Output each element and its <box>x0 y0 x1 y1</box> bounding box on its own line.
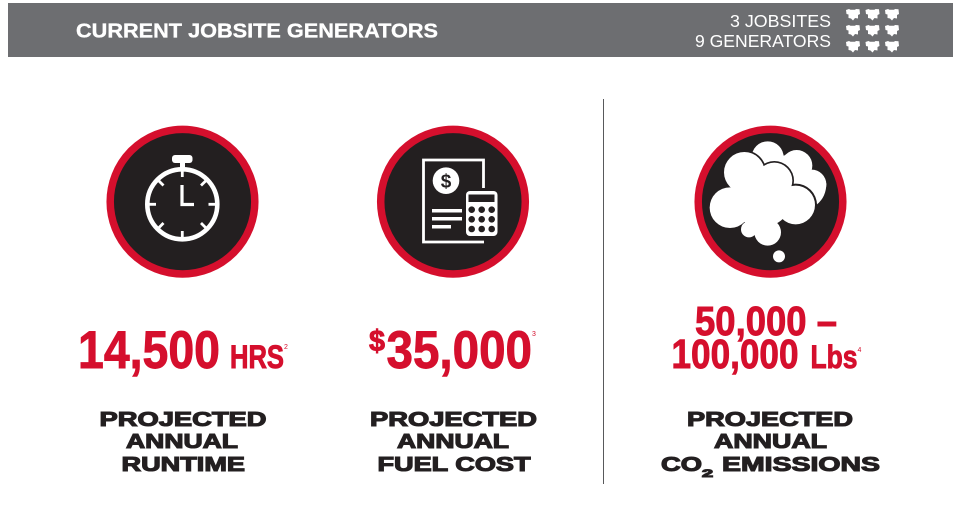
label: CO2 emissions: ANNUAL <box>714 431 827 453</box>
label: CO2 emissions: CO <box>661 454 702 476</box>
stat: fuel cost: $ <box>369 325 385 358</box>
label: fuel cost: ANNUAL <box>397 431 509 453</box>
label: CO2 emissions: 2 <box>702 468 713 480</box>
label: fuel cost <box>370 409 537 476</box>
stat: runtime: HRS <box>230 339 284 375</box>
label: runtime: RUNTIME <box>122 454 245 476</box>
header title: CURRENT JOBSITE GENERATORS <box>76 20 438 42</box>
divider <box>603 99 604 484</box>
label: CO2 emissions <box>661 409 880 480</box>
stat: runtime: 14,500 <box>78 321 220 380</box>
label: runtime: PROJECTED <box>100 409 266 431</box>
label: runtime <box>100 409 266 476</box>
stat: runtime: 2 <box>284 344 288 351</box>
jobsites count <box>695 11 831 51</box>
stat: CO2 emissions: 50,000 – <box>695 298 837 344</box>
stat: CO2 emissions: 4 <box>858 347 862 354</box>
stat: CO2 emissions <box>672 298 862 377</box>
label: runtime: ANNUAL <box>126 431 238 453</box>
label: fuel cost: PROJECTED <box>370 409 537 431</box>
label: CO2 emissions: EMISSIONS <box>722 454 880 476</box>
stat: CO2 emissions: Lbs <box>810 339 858 375</box>
stat: fuel cost: 3 <box>532 331 536 338</box>
stat: fuel cost: 35,000 <box>386 321 532 380</box>
icon: generator grid <box>846 9 899 52</box>
icon: CO2 cloud badge <box>698 129 843 274</box>
header bar <box>8 3 953 57</box>
stat: CO2 emissions: 100,000 <box>672 331 798 377</box>
jobsites count: 3 JOBSITES <box>730 11 831 31</box>
label: fuel cost: FUEL COST <box>378 454 530 476</box>
label: CO2 emissions: PROJECTED <box>687 409 853 431</box>
icon: stopwatch badge <box>110 129 255 274</box>
jobsites count: 9 GENERATORS <box>695 31 831 51</box>
icon: fuel cost document and calculator badge <box>381 129 525 274</box>
icon: fuel cost document and calculator badge: $ <box>441 172 452 192</box>
